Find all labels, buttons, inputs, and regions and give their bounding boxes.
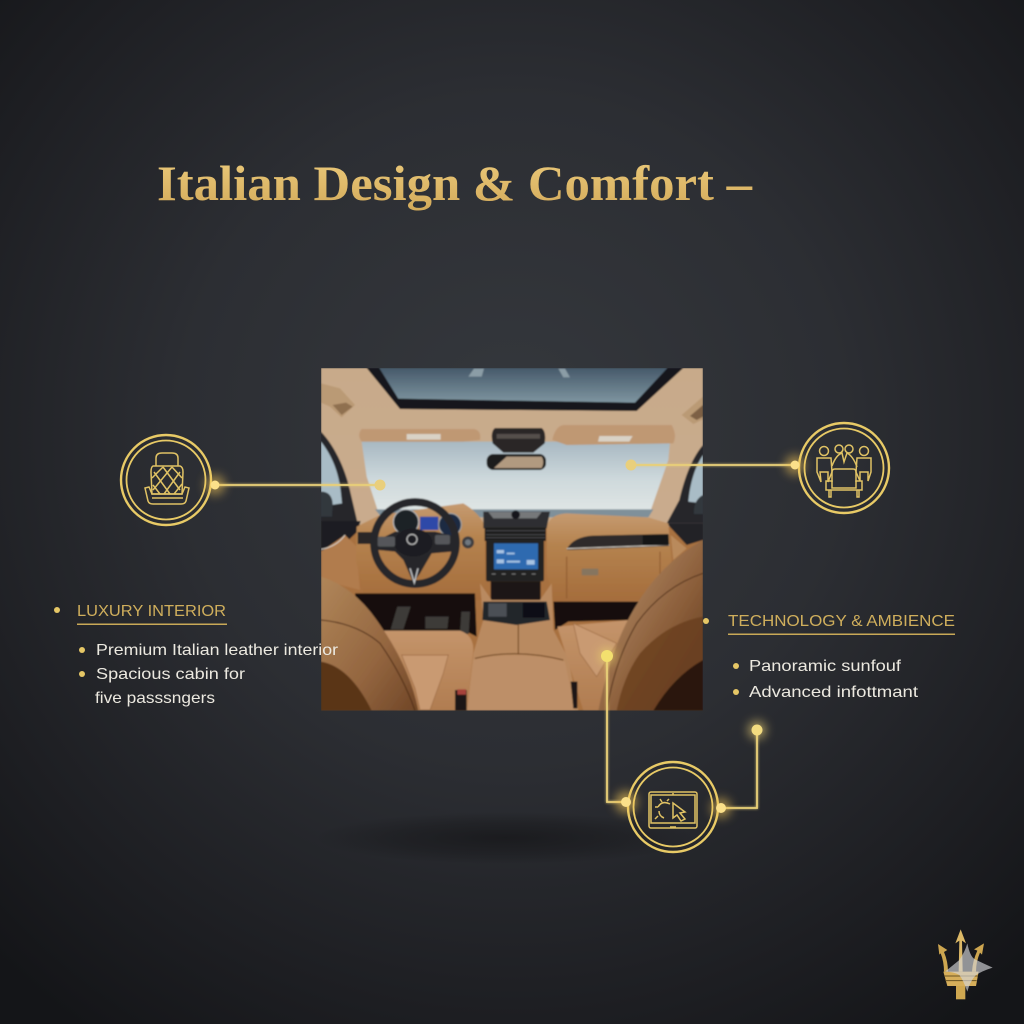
left grab handle [321, 383, 355, 417]
windshield [362, 442, 670, 517]
seat glyph [145, 453, 189, 504]
left window and trim [321, 432, 357, 522]
seat belts [455, 682, 577, 711]
footwells [355, 593, 477, 637]
icon: passengers badge [785, 423, 889, 513]
icon: seat badge [121, 435, 225, 525]
icon: infotainment badge [615, 762, 731, 852]
right seat back [598, 540, 703, 711]
left door panel [321, 521, 361, 551]
right window and trim [667, 445, 703, 523]
photo: car interior [321, 368, 703, 711]
sunroof [367, 368, 683, 411]
text block: technology and ambience: Advanced infottmant [749, 684, 919, 701]
tablet glyph [649, 792, 697, 828]
text block: luxury interior: five passsngers [95, 690, 215, 707]
left cushion [383, 631, 473, 711]
connector: ambience [626, 460, 795, 470]
sun visors [359, 429, 480, 442]
connector: technology from seat [599, 648, 626, 802]
text block: luxury interior: Spacious cabin for [96, 666, 246, 683]
title: Italian Design & Comfort – [157, 155, 753, 211]
overhead console [492, 428, 545, 453]
connector: luxury interior [215, 480, 386, 490]
rear-view mirror [487, 454, 546, 470]
text block: luxury interior [54, 603, 339, 707]
center console [467, 583, 578, 711]
steering wheel [374, 502, 461, 584]
right cushion [557, 620, 630, 711]
right grab handle [682, 397, 703, 424]
icon: trident logo [938, 929, 993, 999]
passengers glyph [817, 445, 871, 497]
right door panel [667, 523, 703, 545]
base tones [321, 368, 703, 535]
text block: luxury interior: LUXURY INTERIOR [77, 603, 226, 620]
dashboard [356, 503, 485, 600]
pedals [391, 607, 470, 634]
text block: luxury interior: Premium Italian leather interior [96, 642, 339, 659]
left seat back [321, 577, 418, 711]
text block: technology and ambience: TECHNOLOGY & AMBIENCE [728, 613, 955, 630]
text block: technology and ambience: Panoramic sunfouf [749, 658, 902, 675]
floor shadow [315, 812, 695, 864]
text block: technology and ambience [703, 613, 955, 701]
center stack and screen [485, 528, 546, 541]
connector: technology to upper node [721, 721, 766, 808]
